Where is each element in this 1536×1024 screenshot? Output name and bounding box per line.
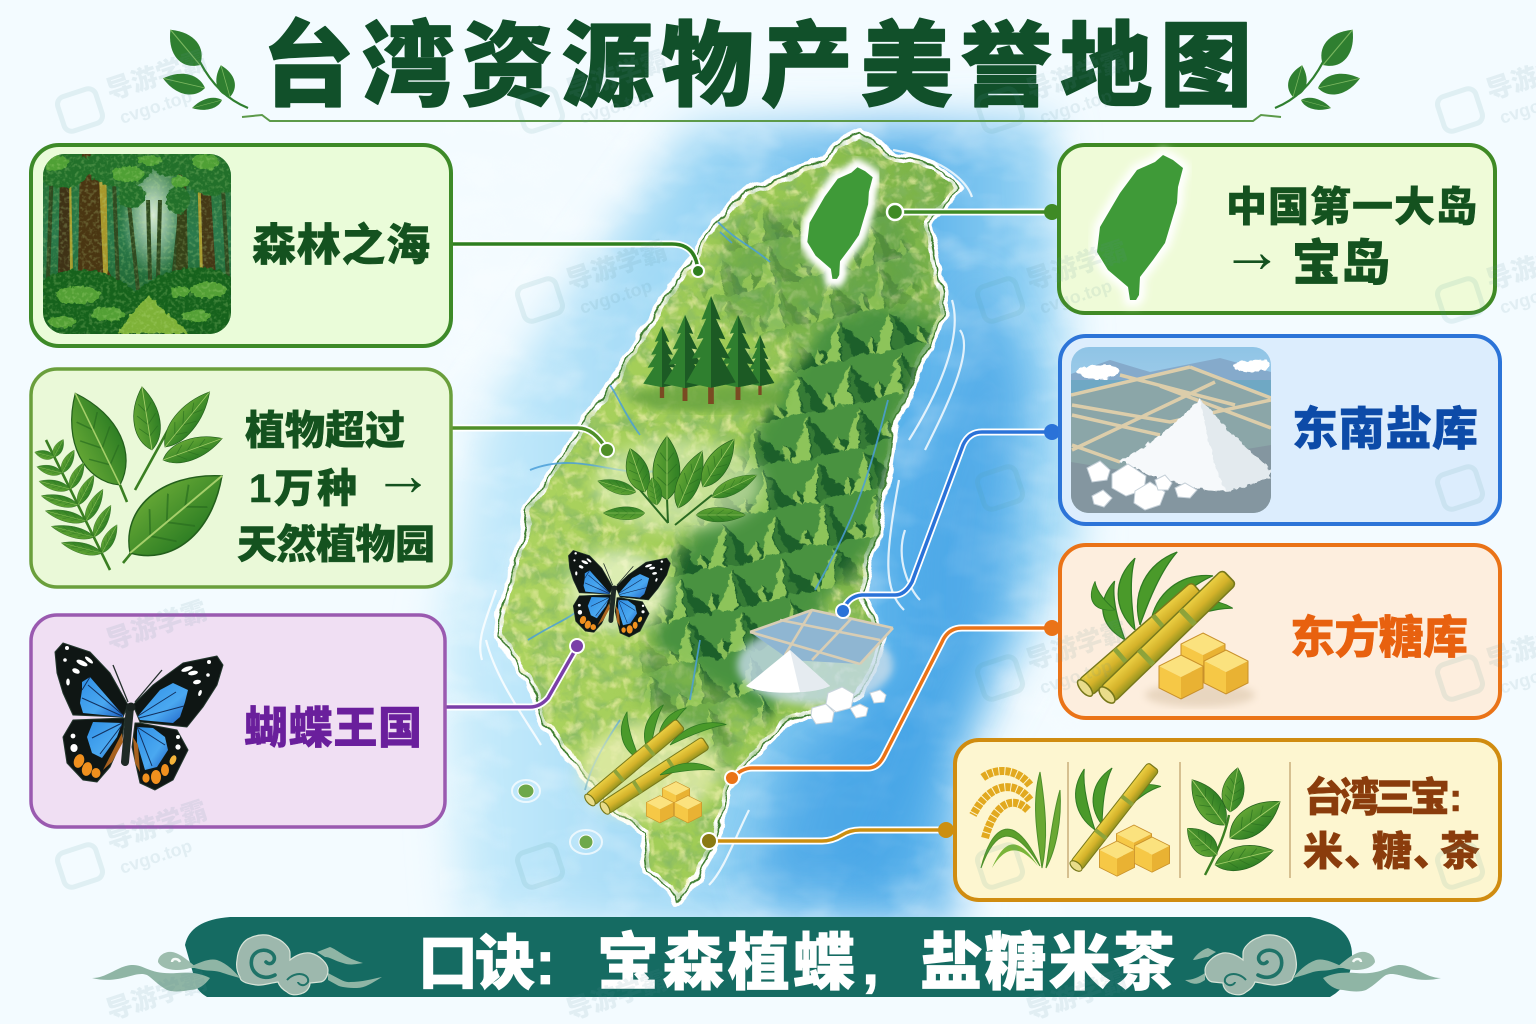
map icon: plant leaves [594, 433, 762, 531]
label: three treasures [1303, 775, 1480, 874]
label: mnemonic: 宝森植蝶 [597, 929, 855, 998]
label: plants text [237, 409, 435, 567]
label: mnemonic: : [535, 929, 556, 998]
watermarks: 导游学霸 [1023, 235, 1131, 296]
illustration: forest [43, 154, 231, 334]
label: three treasures: 台湾三宝 [1304, 775, 1450, 820]
label: plants text: 天然植物园 [237, 523, 435, 567]
map icon: sugar cane and cubes [580, 701, 726, 823]
label: largest island: 宝岛 [1292, 237, 1390, 291]
watermarks: 导游学霸 [103, 965, 211, 1024]
connector: plants [452, 428, 614, 457]
watermarks: 导游学霸 [1023, 45, 1131, 106]
label: largest island: 中国第一大岛 [1226, 184, 1477, 230]
panel: butterfly kingdom [31, 615, 445, 827]
label: butterfly kingdom: 蝴蝶王国 [244, 704, 422, 753]
map icon: butterfly [568, 550, 670, 637]
watermarks: cvgo.top [577, 86, 655, 128]
connector: butterfly [446, 639, 584, 707]
panel: plants [31, 369, 451, 587]
panel: salt store [1060, 336, 1500, 524]
watermarks: cvgo.top [117, 836, 195, 878]
ornament: left cloud [92, 935, 382, 995]
title: 台湾资源物产美誉地图 [262, 16, 1252, 118]
illustration: salt pans [1071, 347, 1271, 513]
label: forest sea: 森林之海 [252, 220, 430, 270]
icon: rice [973, 771, 1060, 868]
panel: forest sea [31, 143, 451, 346]
panel: sugar store [1060, 544, 1500, 718]
connector: sugar [725, 620, 1060, 785]
label: sugar store: 东方糖库 [1290, 612, 1468, 663]
watermarks: cvgo.top [577, 276, 655, 318]
watermarks: 导游学霸 [103, 595, 211, 656]
watermarks: 导游学霸 [563, 45, 671, 106]
label: three treasures: 米、糖、茶 [1303, 830, 1480, 874]
title underline [242, 115, 1281, 121]
sea around the island [440, 120, 1080, 925]
ornament: right cloud [1185, 935, 1441, 995]
map icon: salt pans [737, 610, 893, 724]
connector: salt [836, 424, 1060, 618]
map icon: forest trees [630, 296, 786, 412]
panel: largest island [1059, 145, 1495, 313]
icon: sugar cane [1068, 762, 1170, 876]
watermarks: 导游学霸 [103, 795, 211, 856]
label: mnemonic: 盐糖米茶 [920, 929, 1175, 998]
watermarks: 导游学霸 [563, 965, 671, 1024]
islets [512, 780, 602, 854]
label: mnemonic: 口诀 [418, 930, 535, 997]
watermarks: cvgo.top [1037, 86, 1115, 128]
icon: Taiwan silhouette [1097, 155, 1183, 300]
icon: left title sprig [160, 22, 248, 113]
label: three treasures: : [1449, 776, 1462, 820]
label: plants text: 1万种 [249, 467, 357, 511]
mnemonic banner [92, 917, 1441, 998]
watermarks: 导游学霸 [563, 235, 671, 296]
connector: three treasures [701, 822, 954, 849]
label: plants text: 植物超过 [245, 409, 405, 453]
watermarks: cvgo.top [117, 86, 195, 128]
label: largest island [1221, 184, 1477, 291]
icon: right title sprig [1275, 22, 1363, 113]
watermarks: 导游学霸 [1023, 965, 1131, 1024]
watermarks: cvgo.top [1037, 656, 1115, 698]
illustration: sugar cane and cubes [1075, 544, 1255, 707]
label: salt store: 东南盐库 [1292, 403, 1478, 455]
watermarks: 导游学霸 [103, 45, 211, 106]
panel: three treasures [955, 740, 1500, 900]
map inset: Taiwan silhouette with glow [807, 167, 873, 279]
watermarks: 导游学霸 [1023, 615, 1131, 676]
illustration: butterfly [55, 643, 223, 790]
island map [480, 125, 972, 910]
connector: forest [452, 244, 704, 277]
icon: tea [1180, 766, 1288, 876]
illustration: leaves [34, 384, 240, 574]
watermarks: cvgo.top [1037, 276, 1115, 318]
label: plants text: → [373, 441, 433, 508]
label: largest island: → [1221, 217, 1283, 286]
label: mnemonic: , [862, 929, 879, 998]
connector: island [887, 204, 1060, 220]
label: mnemonic [418, 929, 1175, 998]
